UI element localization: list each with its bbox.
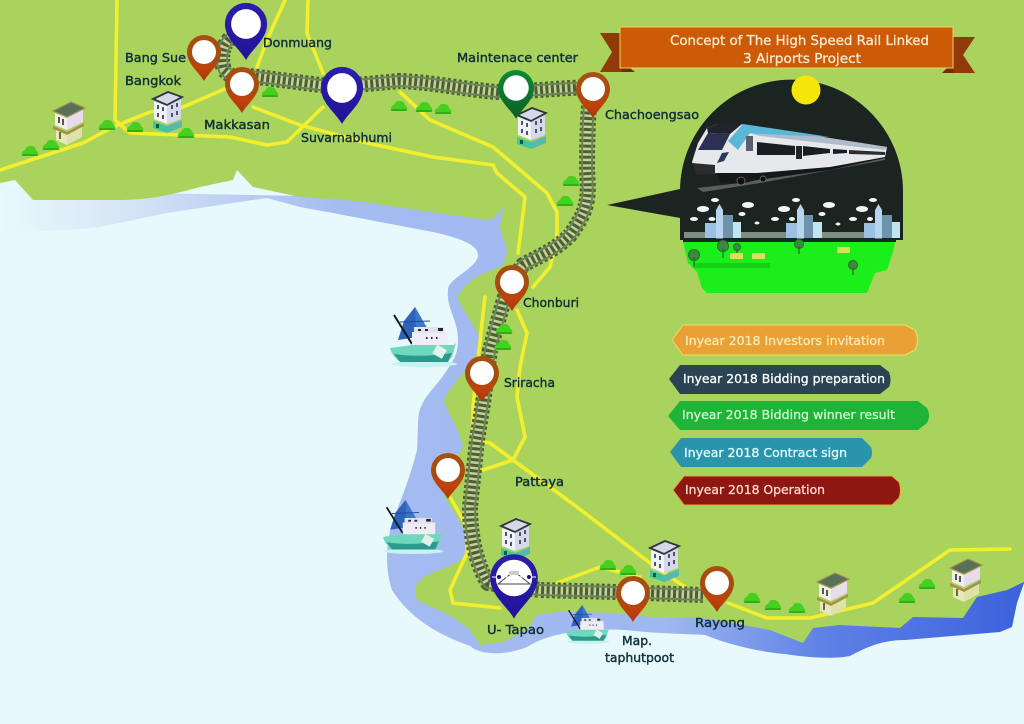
pin: Suvarnabhumi <box>321 67 363 124</box>
label: Makkasan: Makkasan <box>204 118 270 132</box>
park trees and benches <box>688 240 858 275</box>
timeline step: Bidding preparation <box>669 365 890 394</box>
green park ground <box>683 242 895 293</box>
pin: Pattaya <box>431 453 465 499</box>
label: Chachoengsao: Chachoengsao <box>605 108 699 122</box>
train track <box>697 157 885 192</box>
pin: Donmuang <box>225 3 267 60</box>
pin: Map Ta Phut <box>616 576 650 622</box>
label: Pattaya: Pattaya <box>515 475 564 489</box>
pin: Makkasan <box>225 67 259 113</box>
pin: Chonburi <box>495 265 529 311</box>
timeline step: Bidding winner result: Inyear 2018 Bidding winner result <box>682 408 895 422</box>
timeline step: Investors invitation <box>672 325 918 355</box>
timeline step: Contract sign <box>670 438 872 467</box>
timeline step: Operation <box>673 476 900 505</box>
label: Bangkok: Bangkok <box>125 74 181 88</box>
bushes <box>22 87 935 613</box>
title text second line: 3 Airports Project <box>743 52 861 67</box>
clouds <box>690 198 877 226</box>
timeline step: Investors invitation: Inyear 2018 Investors invitation <box>685 334 885 348</box>
illustration: callout circle scene <box>607 76 903 293</box>
label: Rayong: Rayong <box>695 616 745 630</box>
pin: Chachoengsao <box>576 72 610 118</box>
railway track <box>222 36 703 595</box>
label: Chonburi: Chonburi <box>523 296 579 310</box>
pin: U-Tapao with airport icon <box>490 554 538 619</box>
dark circle <box>680 80 903 240</box>
label: Donmuang: Donmuang <box>263 36 332 50</box>
pin: Rayong <box>700 566 734 612</box>
train <box>692 124 887 185</box>
skyline <box>683 204 900 242</box>
ships <box>383 307 610 644</box>
pin: Sriracha <box>465 356 499 402</box>
label: U-Tapao: U- Tapao <box>487 623 544 637</box>
pin: Maintenance center <box>498 70 534 119</box>
label: Map Taphutpoot: taphutpoot <box>605 651 674 665</box>
pin: Bang Sue <box>187 35 221 81</box>
label: Sriracha: Sriracha <box>504 376 555 390</box>
label: Map Taphutpoot <box>605 634 674 665</box>
label: Suvarnabhumi: Suvarnabhumi <box>301 131 392 145</box>
buildings: houses <box>53 102 982 616</box>
callout pointer <box>607 189 686 219</box>
label: Bang Sue: Bang Sue <box>125 51 186 65</box>
title banner <box>600 27 975 73</box>
timeline step: Bidding winner result <box>668 401 929 430</box>
title text: Concept of The High Speed Rail Linked <box>670 34 929 49</box>
timeline step: Operation: Inyear 2018 Operation <box>685 483 825 497</box>
label: Map Taphutpoot: Map. <box>622 634 652 648</box>
label: Maintenace center: Maintenace center <box>457 51 578 65</box>
sun <box>792 76 820 104</box>
timeline step: Contract sign: Inyear 2018 Contract sign <box>684 446 847 460</box>
buildings: city offices <box>153 92 679 582</box>
coastal shallow water band <box>0 190 1024 658</box>
timeline step: Bidding preparation: Inyear 2018 Bidding preparation <box>683 372 885 386</box>
